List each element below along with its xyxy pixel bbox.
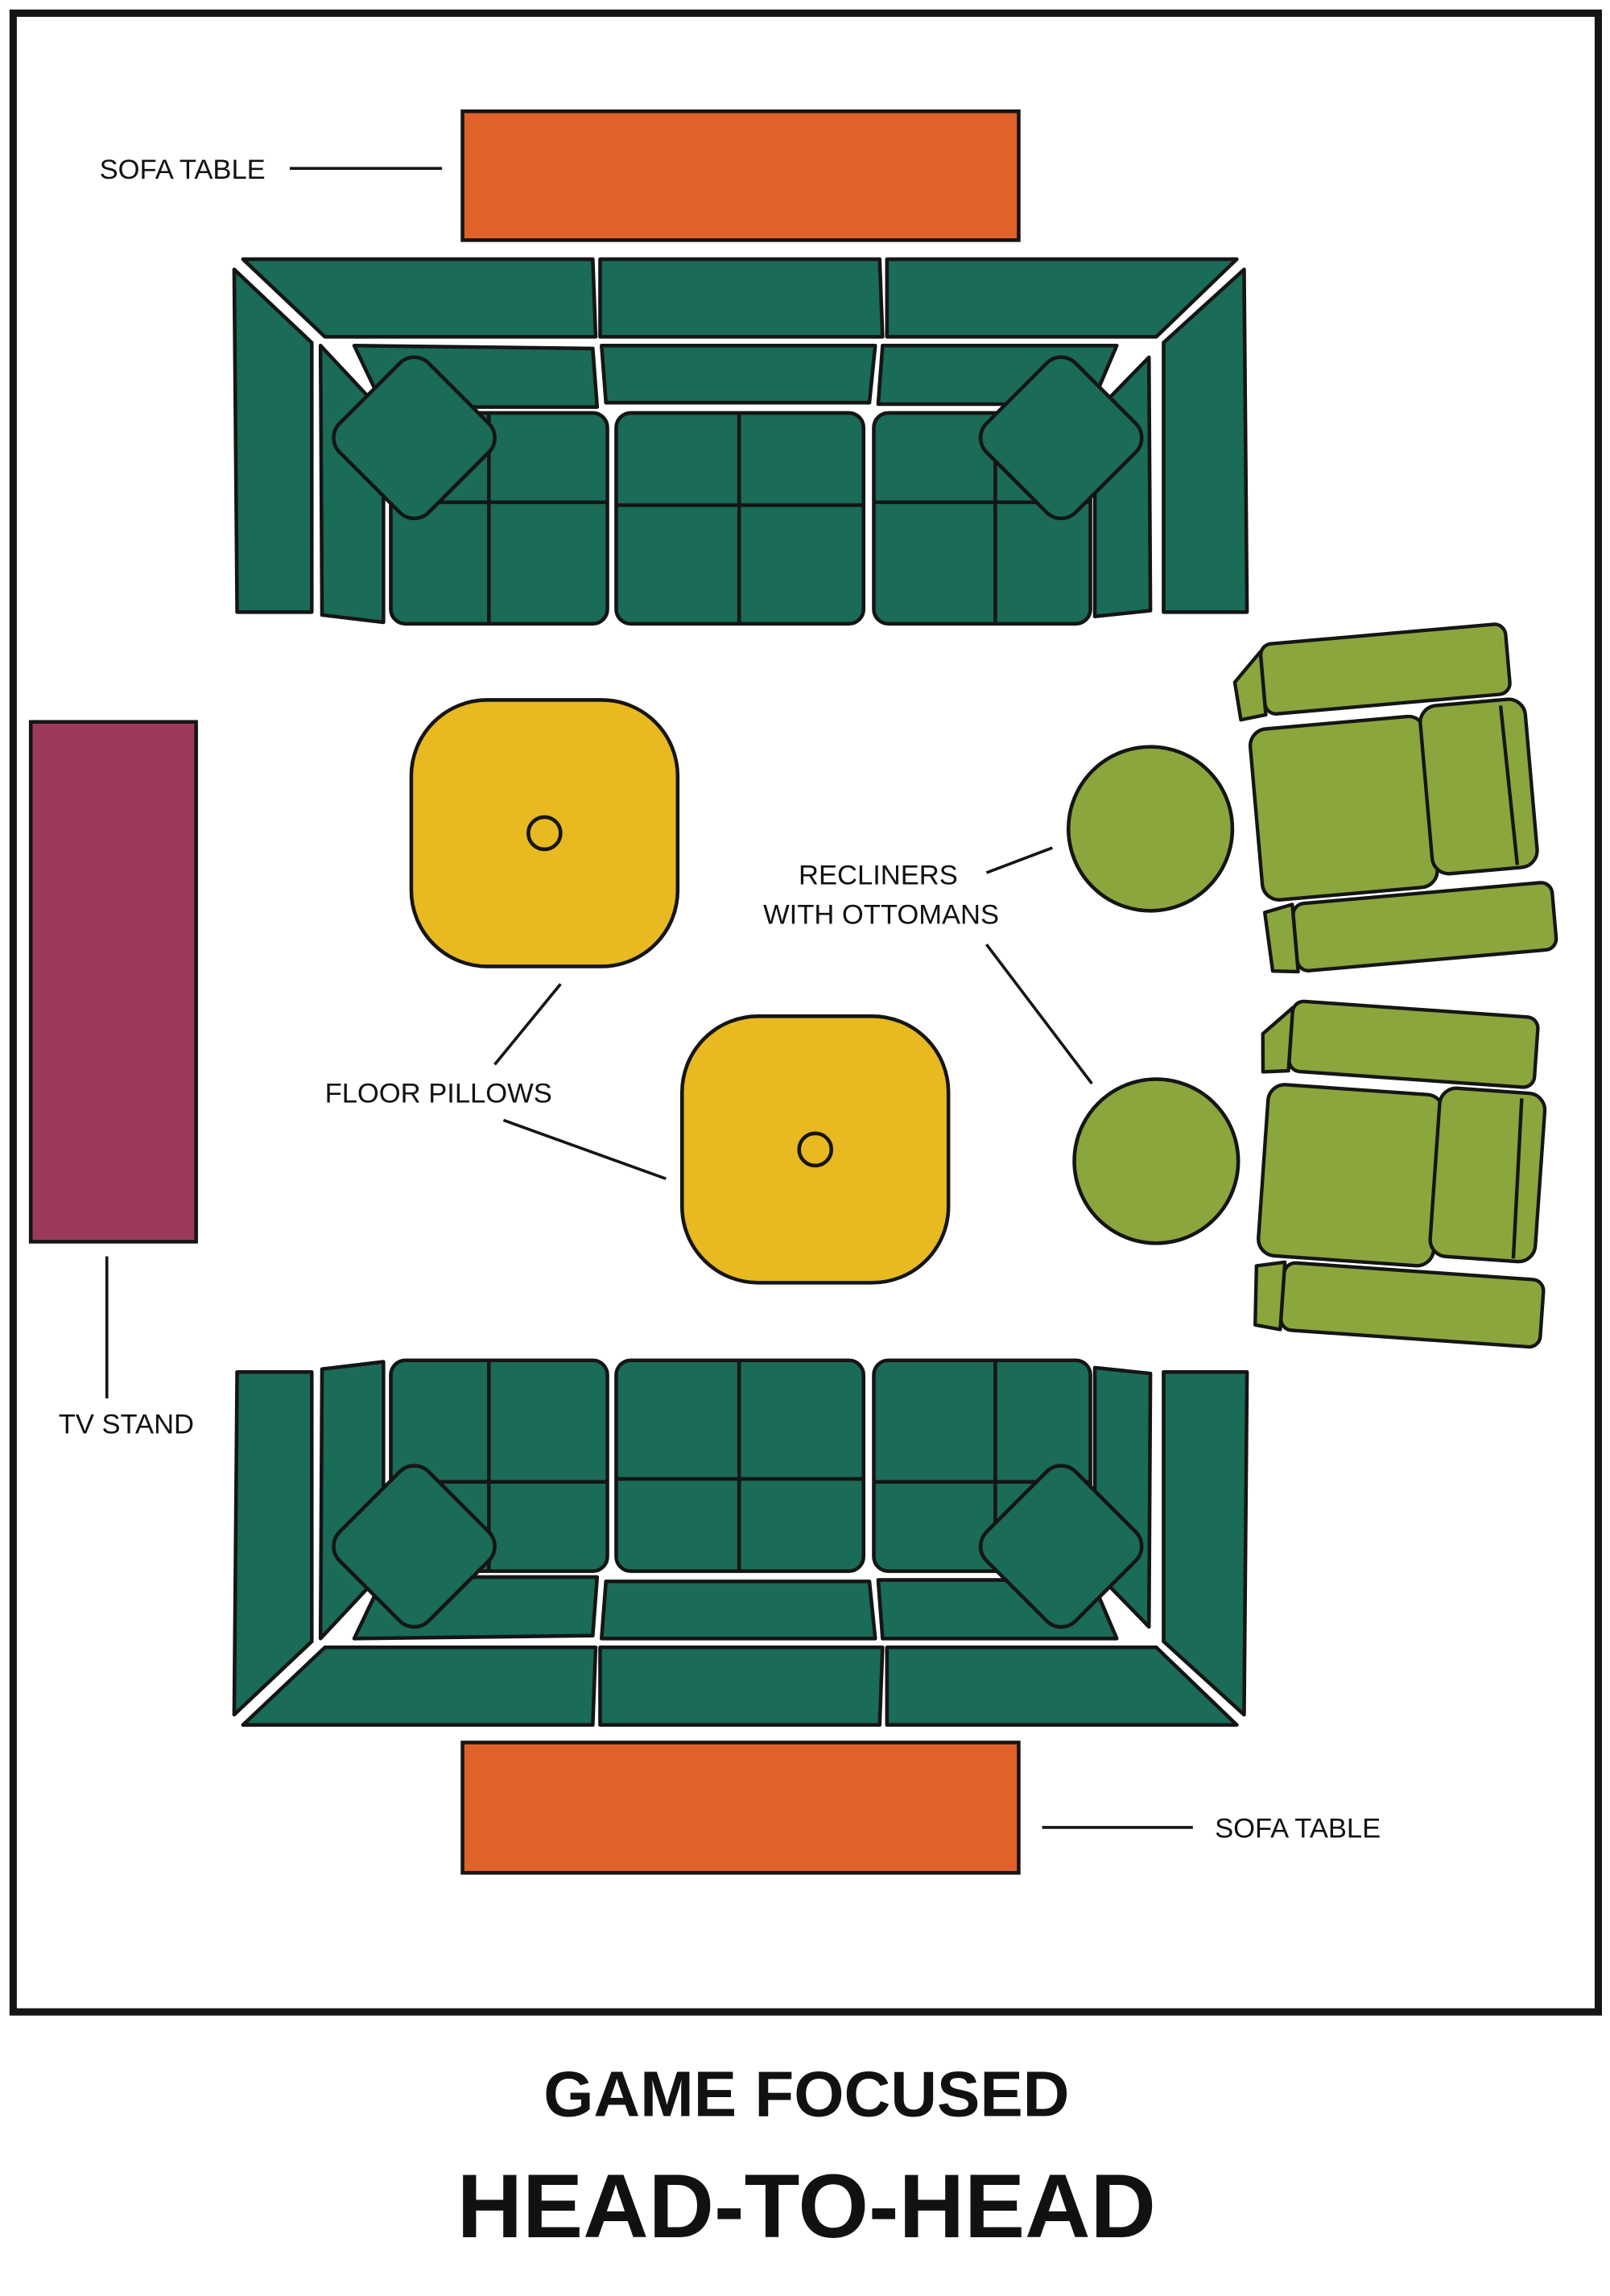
ottoman 1 <box>1068 747 1232 911</box>
label: sofa table bottom: SOFA TABLE <box>1215 1814 1381 1844</box>
label: floor pillows: FLOOR PILLOWS <box>325 1079 552 1109</box>
bottom sofa table <box>463 1742 1018 1873</box>
title: GAME FOCUSED <box>543 2058 1069 2129</box>
label: tv stand: TV STAND <box>59 1410 194 1440</box>
top sofa table <box>463 111 1018 240</box>
label: recliners <box>763 848 1092 1084</box>
top sofa <box>234 259 1247 624</box>
ottoman 2 <box>1075 1080 1238 1243</box>
title: HEAD-TO-HEAD <box>457 2155 1156 2257</box>
title <box>457 2058 1156 2257</box>
floor pillow 1 <box>411 700 678 966</box>
label: recliners: WITH OTTOMANS <box>763 900 999 931</box>
floor pillow 2 <box>682 1016 948 1282</box>
label: floor pillows <box>325 984 666 1179</box>
tv stand <box>31 722 196 1241</box>
recliner 1 <box>1232 621 1557 975</box>
recliner 2 <box>1242 999 1563 1348</box>
label: recliners: RECLINERS <box>799 861 958 891</box>
bottom sofa <box>234 1361 1247 1725</box>
label: sofa table top: SOFA TABLE <box>100 155 266 185</box>
